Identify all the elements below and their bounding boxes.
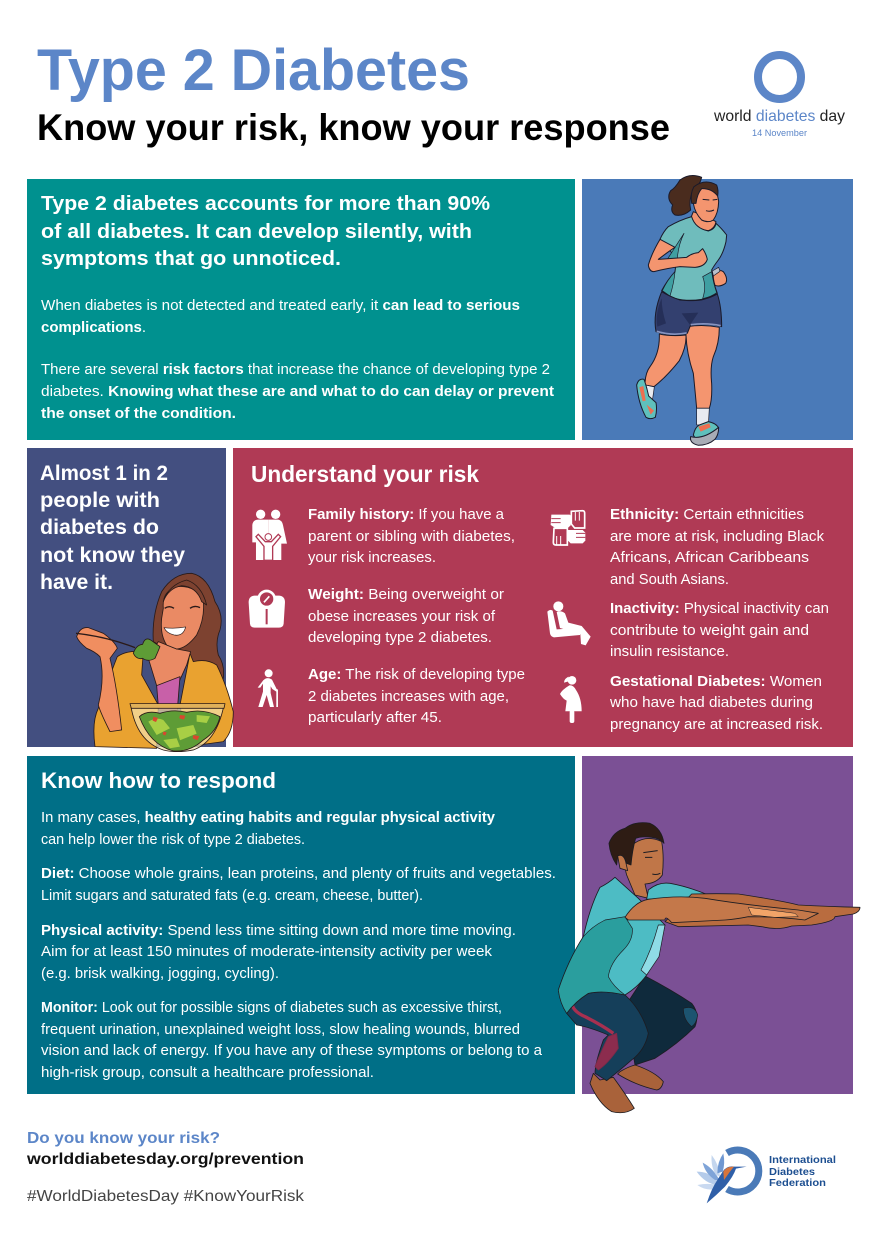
title: Type 2 Diabetes [37, 38, 470, 103]
response body text: (e.g. brisk walking, jogging, cycling). [41, 966, 279, 982]
intro heading: of all diabetes. It can develop silently, with [41, 221, 472, 243]
risk factors right column: Gestational Diabetes: Women [610, 673, 822, 690]
risk factors left column: Family history: If you have a [308, 506, 505, 523]
callout text: Almost 1 in 2 [40, 462, 168, 485]
risk factors right column: insulin resistance. [610, 643, 729, 660]
risk factors right column: and South Asians. [610, 571, 729, 588]
risk factors left column: Weight: Being overweight or [308, 586, 504, 603]
panel: almost 1 in 2 [27, 448, 226, 747]
logo: world diabetes day: 14 November [752, 128, 807, 138]
intro body text: the onset of the condition. [41, 405, 236, 422]
icon: sitting person [547, 601, 591, 645]
icon: scale [249, 590, 285, 628]
intro body text: There are several risk factors that increase the chance of developing type 2 [41, 361, 550, 378]
risk factors right column: Ethnicity: Certain ethnicities [610, 506, 804, 523]
callout text: diabetes do [40, 516, 159, 539]
logo: International Diabetes Federation: Diabetes [769, 1166, 815, 1178]
risk factors left column: developing type 2 diabetes. [308, 629, 492, 646]
response body text: Aim for at least 150 minutes of moderate-intensity activity per week [41, 944, 493, 960]
risk factors right column: pregnancy are at increased risk. [610, 716, 823, 733]
risk factors right column: Inactivity: Physical inactivity can [610, 600, 829, 617]
risk factors left column: particularly after 45. [308, 709, 442, 726]
icon: hands [551, 511, 585, 545]
response body text [41, 810, 556, 1081]
risk factors right column: contribute to weight gain and [610, 622, 809, 639]
footer: call to action: worlddiabetesday.org/prevention [26, 1151, 304, 1168]
risk factors left column: Age: The risk of developing type [308, 666, 525, 683]
risk factors right column [609, 506, 829, 733]
risk factors left column: parent or sibling with diabetes, [308, 528, 515, 545]
callout text: not know they [40, 544, 185, 567]
intro heading [41, 193, 490, 270]
panel: runner background [582, 179, 853, 440]
risk factors left column: 2 diabetes increases with age, [308, 688, 509, 705]
logo: International Diabetes Federation: Federation [769, 1177, 826, 1189]
risk factors right column: are more at risk, including Black [610, 528, 824, 545]
response body text: Physical activity: Spend less time sitting down and more time moving. [41, 923, 516, 939]
response body text: can help lower the risk of type 2 diabetes. [41, 832, 305, 848]
illustration: runner [637, 176, 727, 445]
response body text: Limit sugars and saturated fats (e.g. cream, cheese, butter). [41, 888, 423, 904]
icon: pregnant woman [560, 676, 582, 723]
logo: world diabetes day [713, 55, 845, 138]
panel: squat background [582, 756, 853, 1094]
icon: family [252, 510, 287, 560]
risk factors left column: your risk increases. [308, 549, 436, 566]
risk factors right column: Africans, African Caribbeans [610, 549, 809, 566]
intro heading: symptoms that go unnoticed. [41, 248, 341, 270]
panel: know how to respond [27, 756, 575, 1094]
callout text [40, 462, 185, 594]
icon: elderly person [258, 669, 278, 707]
intro heading: Type 2 diabetes accounts for more than 90% [41, 193, 490, 215]
logo: International Diabetes Federation [697, 1150, 836, 1203]
response body text: frequent urination, unexplained weight loss, slow healing wounds, blurred [41, 1022, 520, 1038]
intro body text: diabetes. Knowing what these are and what to do can delay or prevent [41, 383, 554, 400]
panel: intro [27, 179, 575, 440]
logo: world diabetes day: world diabetes day [713, 108, 845, 125]
intro body text: When diabetes is not detected and treated early, it can lead to serious [41, 297, 520, 314]
response body text: Diet: Choose whole grains, lean proteins, and plenty of fruits and vegetables. [41, 866, 556, 882]
heading: Know how to respond [41, 768, 276, 793]
intro body text: complications. [41, 319, 146, 336]
risk factors left column [308, 506, 525, 726]
panel: understand your risk [233, 448, 853, 747]
response body text: Monitor: Look out for possible signs of diabetes such as excessive thirst, [41, 1000, 502, 1016]
risk factors right column: who have had diabetes during [609, 694, 813, 711]
intro body text [41, 297, 554, 422]
response body text: vision and lack of energy. If you have any of these symptoms or belong to a [41, 1043, 543, 1059]
response body text: high-risk group, consult a healthcare professional. [41, 1065, 374, 1081]
response body text: In many cases, healthy eating habits and regular physical activity [41, 810, 495, 826]
illustration: woman eating salad [76, 573, 233, 752]
footer: hashtags: #WorldDiabetesDay #KnowYourRisk [27, 1188, 305, 1205]
logo: International Diabetes Federation: International [769, 1154, 836, 1166]
footer: call to action [26, 1130, 304, 1168]
subtitle: Know your risk, know your response [37, 107, 670, 148]
footer: call to action: Do you know your risk? [27, 1130, 220, 1147]
callout text: have it. [40, 571, 113, 594]
risk factors left column: obese increases your risk of [308, 608, 496, 625]
heading: Understand your risk [251, 461, 479, 487]
illustration: man squatting [558, 823, 860, 1113]
callout text: people with [40, 489, 160, 512]
